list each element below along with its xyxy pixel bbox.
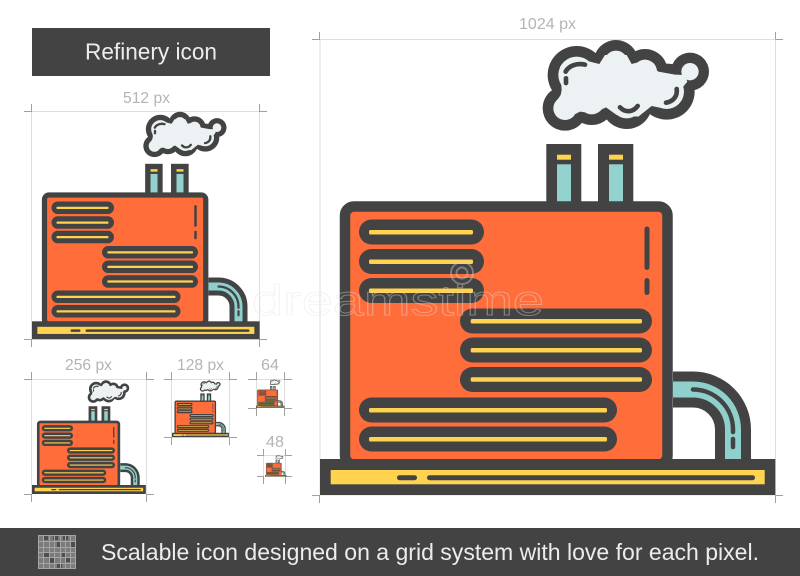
icon: refinery 256 px: [32, 380, 146, 494]
size guide: 128 px: 128 px: [177, 357, 224, 374]
icon: refinery 128 px: [172, 380, 229, 437]
watermark: [252, 262, 544, 325]
title banner: [32, 28, 270, 76]
footer caption: Scalable icon designed on a grid system with love for each pixel.: [101, 539, 759, 565]
footer bar: [0, 528, 800, 576]
icon: refinery 512 px: [32, 112, 260, 339]
size guide: 256 px: [24, 357, 154, 502]
size guide: 1024 px: 1024 px: [519, 16, 576, 33]
size guide: 128 px: [164, 357, 237, 445]
icon: refinery 48 px: [265, 455, 286, 477]
title banner: Refinery icon: [85, 38, 217, 64]
size guide: 512 px: [24, 90, 267, 347]
size guide: 256 px: 256 px: [65, 357, 112, 374]
icon: refinery 1024 px: [320, 40, 775, 495]
size guide: 48: 48: [266, 434, 284, 451]
watermark: dreamstime: [252, 277, 544, 325]
icon: refinery 64 px: [256, 379, 284, 408]
icon: pixel grid: [38, 535, 76, 569]
size guide: 64: [248, 357, 292, 416]
size guide: 512 px: 512 px: [123, 90, 170, 107]
size guide: 64: 64: [261, 357, 279, 374]
size guide: 48: [257, 434, 292, 484]
